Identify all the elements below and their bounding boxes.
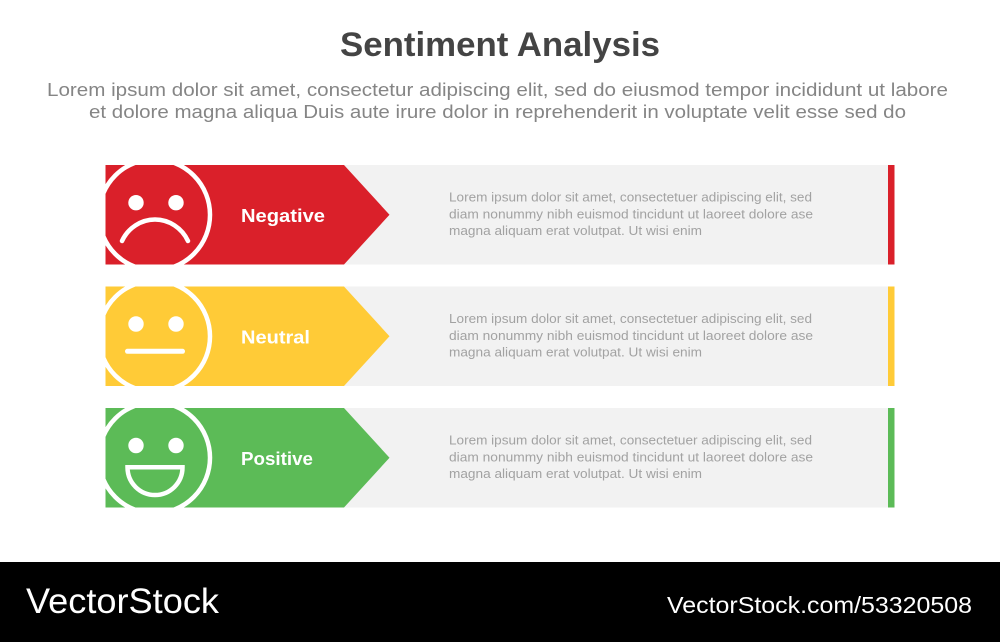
panel: neutral	[106, 286, 894, 386]
description: negative: magna aliquam erat volutpat. Ut wisi enim	[449, 224, 702, 238]
end bar: neutral	[888, 286, 894, 386]
description: neutral: Lorem ipsum dolor sit amet, consectetuer adipiscing elit, sed	[449, 312, 812, 326]
description: negative	[449, 190, 813, 238]
description: negative: Lorem ipsum dolor sit amet, consectetuer adipiscing elit, sed	[449, 190, 812, 204]
icon: sad face	[106, 165, 212, 264]
end bar: negative	[888, 165, 894, 264]
description: positive	[449, 434, 813, 481]
label: positive: Positive	[241, 449, 313, 469]
label: negative: Negative	[241, 206, 325, 226]
description: neutral	[449, 312, 813, 360]
description: neutral: diam nonummy nibh euismod tincidunt ut laoreet dolore ase	[449, 329, 813, 343]
description: neutral: magna aliquam erat volutpat. Ut wisi enim	[449, 346, 702, 360]
subtitle text block	[47, 79, 948, 122]
arrow: negative	[106, 165, 390, 264]
description: positive: diam nonummy nibh euismod tincidunt ut laoreet dolore ase	[449, 450, 813, 464]
icon: neutral face	[106, 286, 212, 386]
title: Sentiment Analysis	[340, 26, 660, 64]
description: positive: magna aliquam erat volutpat. Ut wisi enim	[449, 467, 702, 481]
arrow: positive	[106, 408, 390, 508]
subtitle text block: Lorem ipsum dolor sit amet, consectetur adipiscing elit, sed do eiusmod tempor incididunt ut labore	[47, 79, 948, 100]
footer logo: VectorStock	[26, 582, 220, 621]
footer url: VectorStock.com/53320508	[667, 592, 972, 618]
icon: happy face	[106, 408, 212, 508]
arrow: neutral	[106, 286, 390, 386]
panel: negative	[106, 165, 894, 264]
label: neutral: Neutral	[241, 328, 310, 348]
description: positive: Lorem ipsum dolor sit amet, consectetuer adipiscing elit, sed	[449, 434, 812, 448]
subtitle text block: et dolore magna aliqua Duis aute irure dolor in reprehenderit in voluptate velit esse sed do	[89, 101, 906, 122]
footer watermark bar	[0, 562, 1000, 642]
panel: positive	[106, 408, 894, 508]
description: negative: diam nonummy nibh euismod tincidunt ut laoreet dolore ase	[449, 207, 813, 221]
end bar: positive	[888, 408, 894, 508]
